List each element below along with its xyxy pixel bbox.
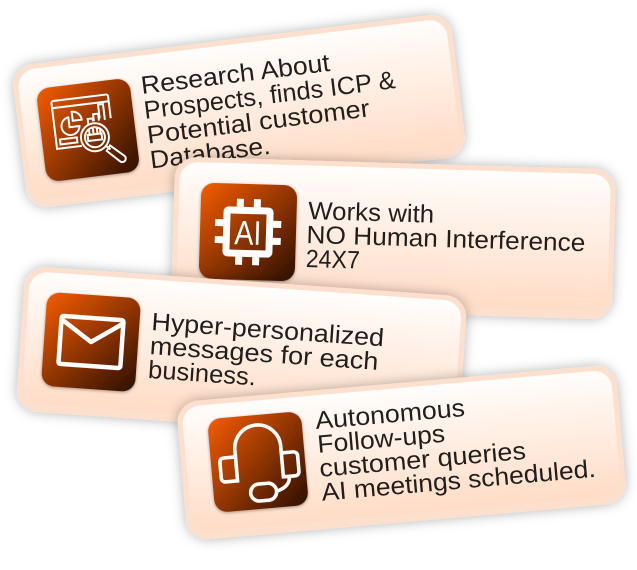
text: follow-ups: customer queries bbox=[318, 437, 527, 483]
text: messages bbox=[147, 308, 385, 400]
text: research: Potential customer bbox=[145, 94, 371, 150]
text: follow-ups: Autonomous bbox=[314, 394, 466, 435]
text: no human: 24X7 bbox=[305, 245, 360, 275]
card background bbox=[176, 364, 627, 541]
card background bbox=[171, 157, 616, 320]
text: messages: Hyper-personalized bbox=[151, 308, 385, 352]
card background bbox=[11, 13, 467, 209]
text: no human bbox=[305, 197, 587, 281]
icon: analytics magnifier bbox=[36, 78, 140, 182]
text: no human: Works with bbox=[308, 197, 435, 229]
text: research: Research About bbox=[139, 49, 331, 100]
text: research: Prospects, finds ICP & bbox=[142, 66, 397, 125]
icon: headset bbox=[207, 411, 309, 513]
text: messages: business. bbox=[147, 356, 257, 391]
panel: research card bbox=[11, 13, 467, 209]
icon: AI chip bbox=[199, 183, 297, 281]
text: research bbox=[139, 41, 403, 174]
text: follow-ups bbox=[314, 383, 597, 507]
panel: messages card bbox=[16, 266, 468, 441]
panel: follow-ups card bbox=[176, 364, 627, 541]
text: follow-ups: AI meetings scheduled. bbox=[320, 455, 597, 507]
text: no human: NO Human Interference bbox=[306, 221, 586, 257]
text: messages: messages for each bbox=[149, 332, 379, 376]
icon: AI chip: AI bbox=[234, 214, 262, 253]
icon: envelope bbox=[41, 292, 141, 392]
text: follow-ups: Follow-ups bbox=[316, 420, 446, 459]
panel: no human card bbox=[171, 157, 616, 320]
text: research: Database. bbox=[148, 132, 272, 174]
card background bbox=[16, 266, 468, 441]
